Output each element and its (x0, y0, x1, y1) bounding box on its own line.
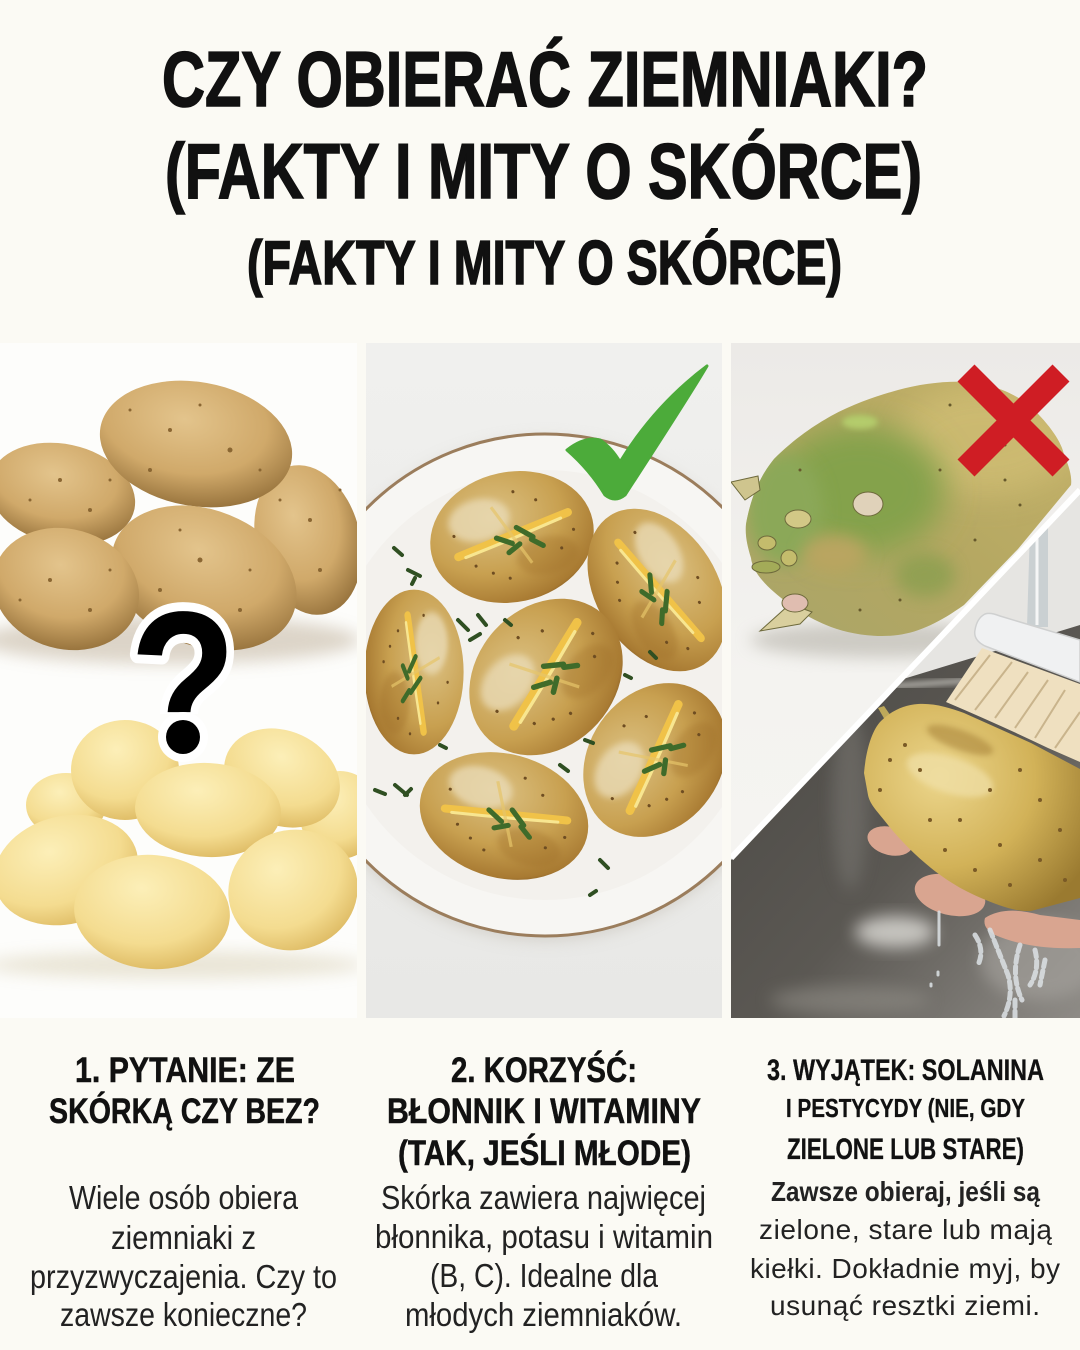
text block 2: Skórka zawiera najwięcej (381, 1179, 706, 1216)
heading 1 (49, 1051, 320, 1131)
peeled potato pile (0, 710, 380, 979)
raw potato pile (0, 366, 377, 677)
text block 1 (30, 1179, 337, 1333)
herbs on the plate (375, 548, 656, 895)
icon: green check mark (567, 366, 707, 499)
heading 1: 1. PYTANIE: ZE (75, 1051, 295, 1090)
icon: question mark (130, 602, 234, 762)
washing scene (731, 480, 1080, 1020)
title: (FAKTY I MITY O SKÓRCE) (247, 229, 842, 298)
water stream (1027, 528, 1048, 627)
heading 2 (387, 1050, 701, 1173)
caption: exception (750, 1054, 1060, 1321)
text block 2: (B, C). Idealne dla (430, 1257, 659, 1294)
plate (366, 432, 722, 944)
text block 3 (750, 1176, 1060, 1321)
hand (864, 822, 1080, 948)
text block 1: zawsze konieczne? (60, 1296, 307, 1333)
title (162, 35, 928, 298)
text block 3: usunąć resztki ziemi. (770, 1290, 1040, 1321)
green sprouting potato (731, 370, 1080, 658)
text block 2: młodych ziemniaków. (405, 1296, 682, 1333)
white diagonal divider (731, 490, 1080, 858)
text block 3: Zawsze obieraj, jeśli są (771, 1176, 1040, 1207)
metal sink (731, 625, 1080, 1018)
panel: baked potatoes on a plate (366, 343, 722, 1018)
baked potatoes (366, 471, 722, 880)
heading 1: SKÓRKĄ CZY BEZ? (49, 1091, 320, 1131)
text block 2: błonnika, potasu i witamin (375, 1218, 713, 1255)
brush head (975, 613, 1080, 682)
caption: benefit (375, 1050, 713, 1333)
sprouts (731, 476, 883, 631)
potato being washed (864, 704, 1080, 911)
text block 1: przyzwyczajenia. Czy to (30, 1258, 337, 1295)
heading 2: (TAK, JEŚLI MŁODE) (398, 1133, 691, 1173)
panel: green potato and washing (731, 343, 1080, 1020)
icon: red cross (966, 373, 1061, 468)
heading 2: 2. KORZYŚĆ: (451, 1050, 637, 1090)
text block 3: kiełki. Dokładnie myj, by (750, 1253, 1060, 1284)
text block 1: ziemniaki z (111, 1219, 256, 1256)
heading 2: BŁONNIK I WITAMINY (387, 1092, 701, 1131)
heading 3 (767, 1054, 1044, 1166)
water drops (931, 912, 1045, 1018)
panel: raw and peeled potatoes (0, 380, 357, 980)
text block 2 (375, 1179, 713, 1333)
heading 3: I PESTYCYDY (NIE, GDY (786, 1093, 1025, 1123)
text block 1: Wiele osób obiera (69, 1179, 299, 1216)
brush bristles (946, 648, 1080, 762)
icon: question mark: ? (130, 569, 236, 799)
text block 3: zielone, stare lub mają (759, 1214, 1052, 1245)
caption: question (30, 1051, 337, 1333)
